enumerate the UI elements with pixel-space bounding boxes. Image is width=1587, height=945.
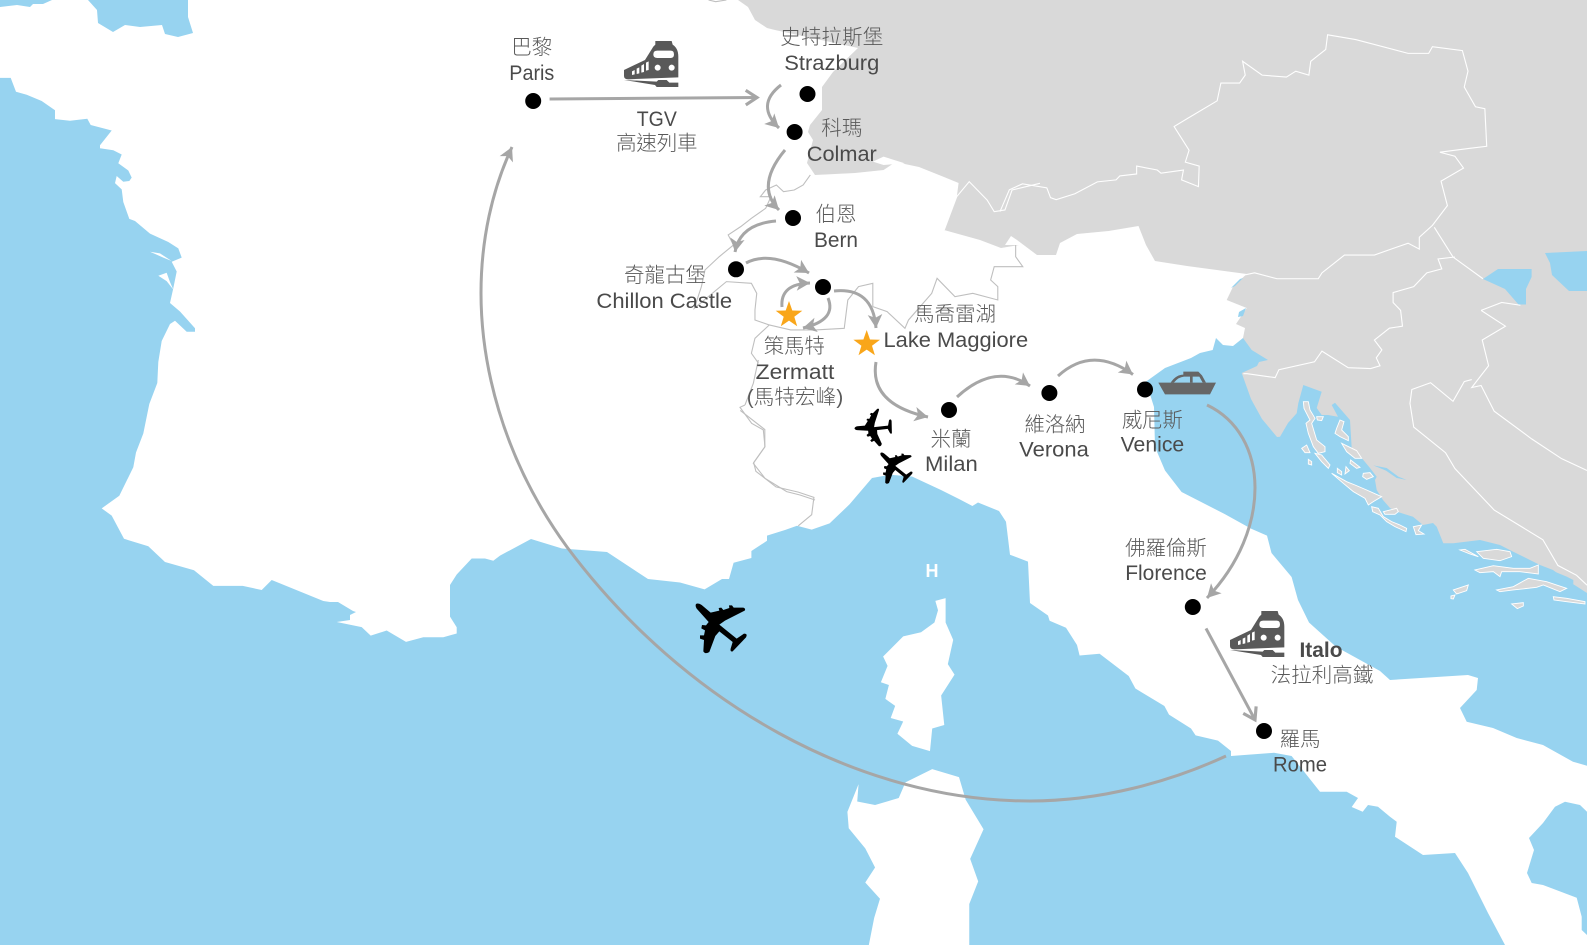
label: Rome: Rome [1273,754,1327,777]
route arrow: Paris to Strasbourg [550,98,757,99]
label: Milan: Milan [925,453,978,476]
label: Venice [1121,409,1184,456]
label: Zermatt: Zermatt [756,361,834,384]
small lagoons [1231,278,1246,317]
land: Corsica [881,598,955,751]
label: Milan [925,428,978,476]
label: Strasbourg: 史特拉斯堡 [780,26,883,49]
label: Paris [509,36,554,85]
label: TGV: 高速列車 [616,132,698,155]
label: Paris: Paris [509,62,554,85]
route arrow: Florence to Rome [1206,628,1255,720]
icon: TGV train [624,41,678,87]
label: H mark on the sea: H [926,561,938,581]
label: Florence: Florence [1125,562,1207,585]
label: Zermatt: 策馬特 [764,335,825,358]
label: Lake Maggiore [884,303,1028,352]
icon: Italo train [1230,611,1284,657]
label: Italo: Italo [1300,639,1342,662]
label: Florence: 佛羅倫斯 [1125,537,1207,560]
lakes in Hungary [1483,251,1587,304]
label: Strasbourg [780,26,883,75]
label: Colmar [807,117,877,166]
label: Lake Maggiore: 馬喬雷湖 [914,303,996,326]
label: Colmar: 科瑪 [821,117,862,140]
label: Chillon Castle: Chillon Castle [596,290,732,313]
label: Italo [1271,639,1373,687]
icon: plane west of Milan [854,406,899,450]
small islands off the Atlantic coast [150,252,173,290]
label: Bern: Bern [814,229,858,252]
label: Verona [1019,414,1089,462]
route arrow: Bern to Chillon [735,221,776,252]
label: TGV: TGV [637,108,677,131]
label: Bern: 伯恩 [816,203,856,226]
icon: plane at Genoa [880,453,912,484]
icon: star at Lake Maggiore [853,330,880,355]
city markers [525,86,1272,739]
label: Zermatt [747,335,843,409]
route arrow: Venice to Florence [1207,405,1255,598]
route arrow: Strasbourg to Colmar [767,85,781,128]
label: Verona: Verona [1019,439,1089,462]
label: Paris: 巴黎 [511,36,552,59]
icon: star at Zermatt [776,301,802,326]
label: Rome [1273,728,1327,777]
route arrow: Chillon to Zermatt [746,258,809,273]
label: Venice: 威尼斯 [1122,409,1183,432]
route arrow: Rome back to Paris [481,147,1226,801]
route arrow: Milan to Verona [957,376,1030,397]
border lines on white land [694,0,1023,526]
label: Lake Maggiore: Lake Maggiore [884,329,1028,352]
land: central Europe in grey [738,0,1587,593]
label: TGV [616,108,698,155]
route arrow: Colmar to Bern [768,150,785,210]
icon: large plane over the sea [696,604,747,653]
route arrow: Zermatt to star [803,298,830,328]
label: Chillon Castle: 奇龍古堡 [624,264,706,287]
icon: boat [1158,372,1216,394]
land: Sardinia [847,769,984,945]
label: Chillon Castle [596,264,732,313]
label: Milan: 米蘭 [930,428,972,451]
Adriatic islands [1302,402,1585,609]
label: Strasbourg: Strazburg [784,52,879,75]
route arrow: star to Zermatt [782,283,810,307]
label: Zermatt: (馬特宏峰) [747,386,843,409]
border Germany Austria near Switzerland [873,157,1040,230]
label: Bern [814,203,858,252]
label: Italo: 法拉利高鐵 [1271,664,1373,687]
route arrow: Verona to Venice [1058,360,1133,376]
route arrow: Lake Maggiore to Milan [875,362,928,417]
label: Rome: 羅馬 [1280,728,1320,751]
country borders on grey land [1000,35,1587,585]
label: Colmar: Colmar [807,143,877,166]
route arrow: Zermatt to Lake Maggiore [834,291,876,328]
label: Verona: 維洛納 [1024,414,1086,436]
label: Venice: Venice [1121,434,1184,456]
label: Florence [1125,537,1207,585]
